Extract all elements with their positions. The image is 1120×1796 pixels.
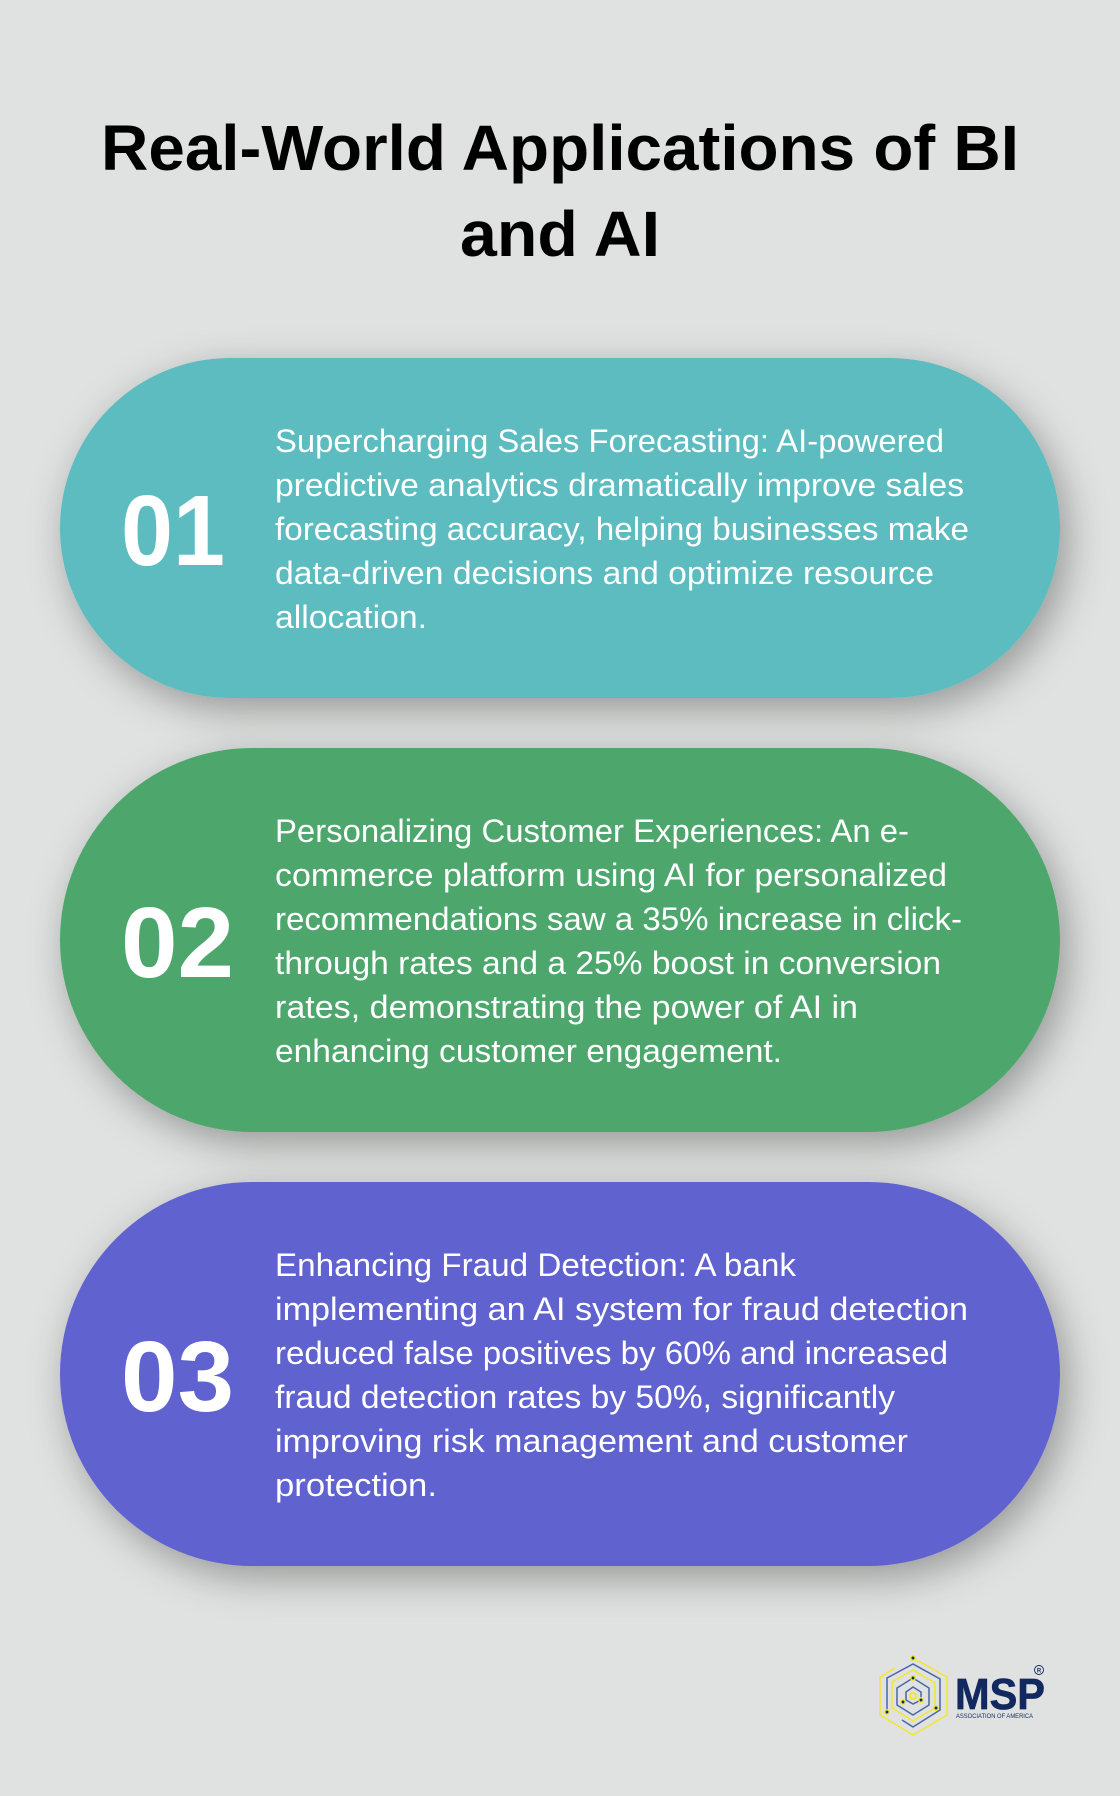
text: customer experiences: enhancing customer engagement. bbox=[275, 1033, 782, 1069]
text: fraud detection: reduced false positives by 60% and increased bbox=[275, 1335, 948, 1371]
panel: fraud detection bbox=[60, 1182, 1060, 1566]
text: sales forecasting bbox=[275, 423, 969, 635]
title bbox=[101, 112, 1019, 270]
text: fraud detection: implementing an AI system for fraud detection bbox=[275, 1291, 968, 1327]
text: sales forecasting: allocation. bbox=[275, 599, 427, 635]
text: sales forecasting: predictive analytics dramatically improve sales bbox=[275, 467, 964, 503]
text: customer experiences: through rates and a 25% boost in conversion bbox=[275, 945, 941, 981]
title: Real-World Applications of BI bbox=[101, 112, 1019, 184]
number 01: 01 bbox=[121, 475, 225, 587]
text: sales forecasting: Supercharging Sales Forecasting: AI-powered bbox=[275, 423, 944, 459]
logo wordmark: MSP bbox=[955, 1670, 1045, 1719]
number 02: 02 bbox=[121, 887, 234, 999]
number 03: 03 bbox=[121, 1321, 234, 1433]
registered mark bbox=[1034, 1666, 1044, 1674]
logo tagline: ASSOCIATION OF AMERICA bbox=[956, 1713, 1034, 1720]
text: fraud detection bbox=[275, 1247, 968, 1503]
title: and AI bbox=[460, 198, 660, 270]
text: fraud detection: fraud detection rates by 50%, significantly bbox=[275, 1379, 896, 1415]
text: fraud detection: Enhancing Fraud Detection: A bank bbox=[275, 1247, 797, 1283]
logo: MSP Association of America bbox=[880, 1656, 1045, 1735]
text: customer experiences: Personalizing Customer Experiences: An e- bbox=[275, 813, 909, 849]
panel: sales forecasting bbox=[60, 358, 1060, 698]
text: sales forecasting: forecasting accuracy, helping businesses make bbox=[275, 511, 969, 547]
registered mark: R bbox=[1037, 1668, 1042, 1674]
panel: customer experiences bbox=[60, 748, 1060, 1132]
text: customer experiences: recommendations saw a 35% increase in click- bbox=[275, 901, 962, 937]
text: customer experiences: rates, demonstrating the power of AI in bbox=[275, 989, 858, 1025]
icon: hexagon network bbox=[880, 1656, 947, 1735]
text: customer experiences bbox=[275, 813, 962, 1069]
text: fraud detection: protection. bbox=[275, 1467, 437, 1503]
text: fraud detection: improving risk management and customer bbox=[275, 1423, 908, 1459]
text: customer experiences: commerce platform using AI for personalized bbox=[275, 857, 947, 893]
text: sales forecasting: data-driven decisions and optimize resource bbox=[275, 555, 934, 591]
